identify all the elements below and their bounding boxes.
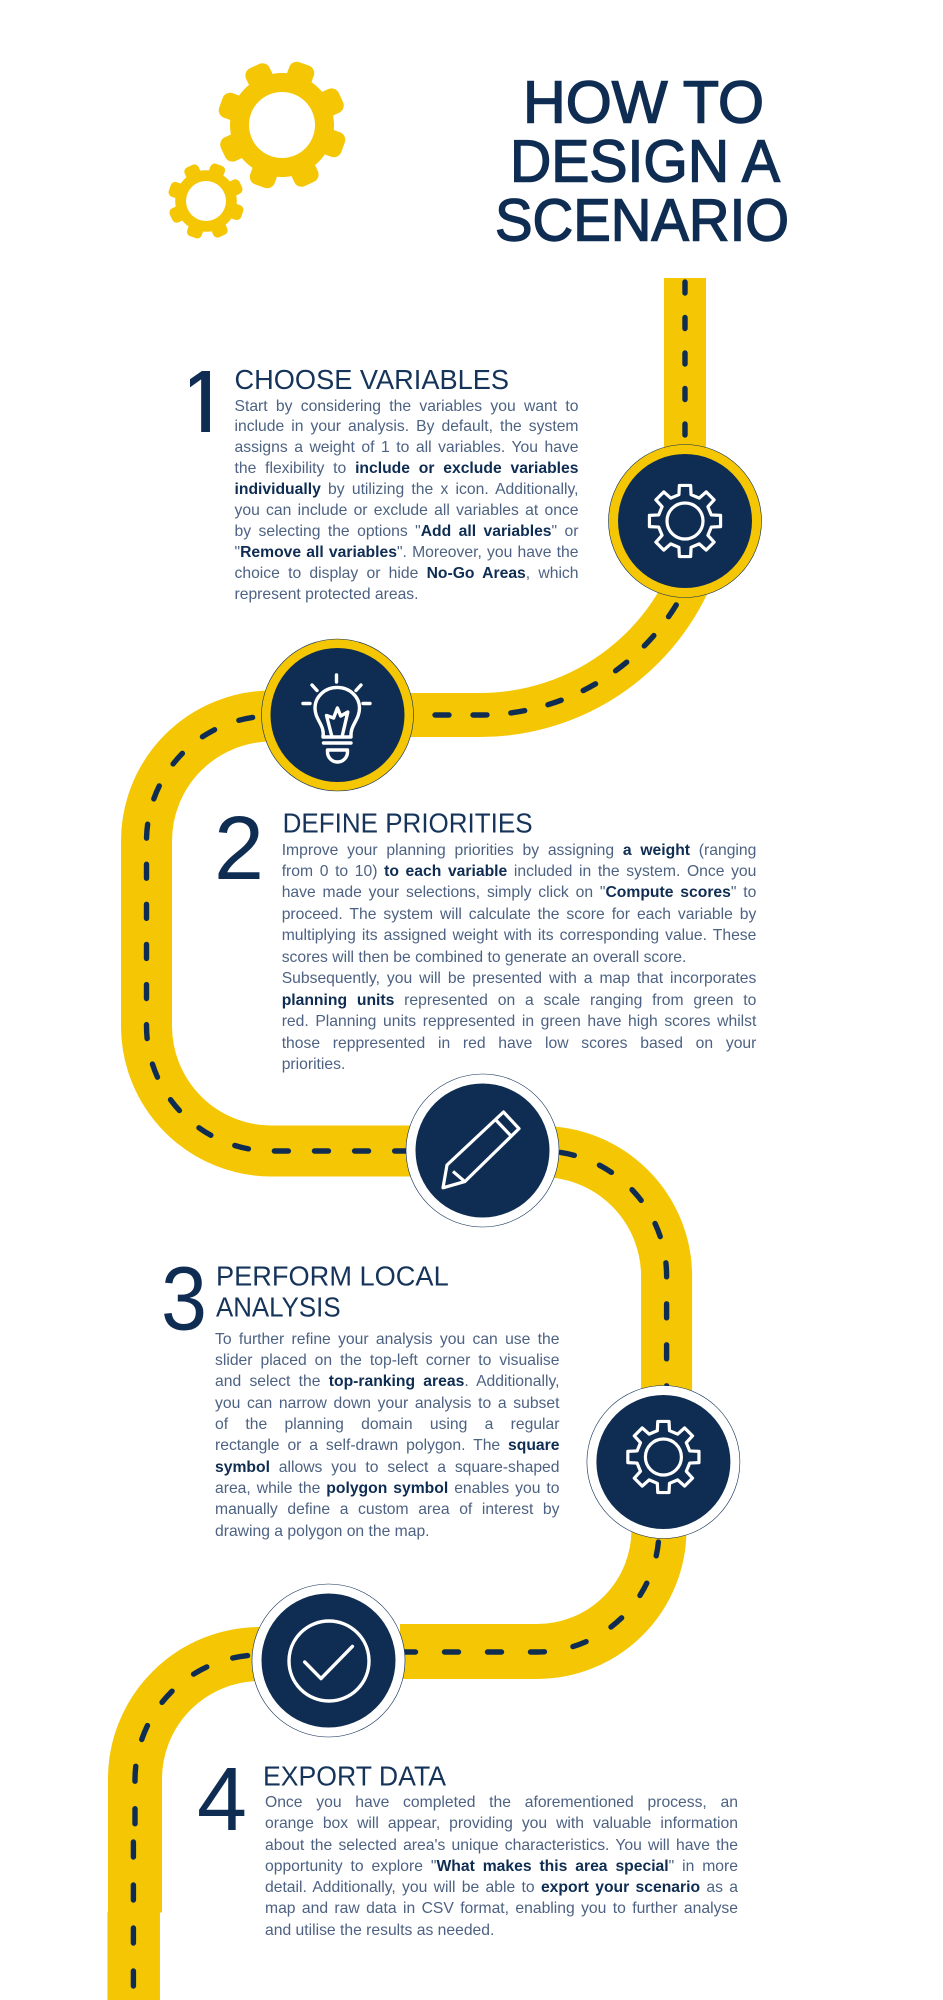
number 2: 2 [214,799,264,899]
text: step 3 description: symbol allows you to select a square-shaped [215,1459,560,1476]
text: step 4 description: opportunity to explore "What makes this area special" in more [265,1858,738,1875]
milestone 3: pencil icon [406,1074,559,1227]
text: step 4 description: detail. Additionally, you will be able to export your scenario as a [265,1879,738,1896]
number 4: 4 [197,1750,247,1850]
road centre dashes [133,282,703,2000]
text: step 2 description: red. Planning units reppresented in green have high scores whilst [282,1013,756,1030]
text: step 4 description: map and raw data in CSV format, enabling you to further analyse [265,1900,738,1917]
text: step 3 description: of the planning domain using a regular [215,1416,560,1433]
text: step 1 description: the flexibility to include or exclude variables [234,460,578,477]
heading: perform local analysis: PERFORM LOCAL [216,1261,449,1292]
title [495,70,789,254]
text: step 3 description: manually define a custom area of interest by [215,1501,560,1518]
icon: small gear [157,152,255,250]
title: SCENARIO [495,188,789,254]
text: step 3 description: slider placed on the top-left corner to visualise [215,1352,560,1369]
milestone 4: gear icon [587,1386,740,1538]
text: step 1 description: you can include or exclude all variables at once [234,502,578,519]
text: step 2 description: Subsequently, you will be presented with a map that incorporates [282,970,756,987]
panel: step 4 export data [197,1750,738,1939]
text: step 4 description [265,1794,738,1939]
panel: step 2 define priorities [214,799,756,1073]
text: step 3 description: To further refine your analysis you can use the [215,1331,560,1348]
heading: choose variables: CHOOSE VARIABLES [234,364,509,395]
text: step 2 description: scores will then be combined to generate an overall score. [282,949,686,966]
text: step 4 description: Once you have completed the aforementioned process, an [265,1794,738,1811]
text: step 3 description: rectangle or a self-drawn polygon. The square [215,1437,560,1454]
title: DESIGN A [510,128,781,194]
text: step 2 description: have made your selections, simply click on "Compute scores" to [282,884,756,901]
text: step 2 description: Improve your planning priorities by assigning a weight (ranging [282,842,756,858]
number 1: 1 [176,350,232,462]
text: step 1 description: individually by utilizing the x icon. Additionally, [234,481,578,498]
text: step 4 description: about the selected area's unique characteristics. You will have the [265,1837,738,1854]
text: step 3 description [215,1331,560,1540]
text: step 2 description [282,842,756,1073]
text: step 1 description: include in your analysis. By default, the system [234,418,578,435]
milestone 1: gear icon [608,444,762,598]
text: step 1 description: assigns a weight of 1 to all variables. You have [234,439,578,456]
milestone 2: light bulb icon [262,639,414,791]
winding yellow road [134,278,703,2000]
title: HOW TO [523,70,764,136]
text: step 3 description: you can narrow down your analysis to a subset [215,1395,560,1412]
heading: perform local analysis: ANALYSIS [216,1292,341,1322]
text: step 1 description: by selecting the options "Add all variables" or [234,523,578,540]
panel: step 1 choose variables [190,364,579,603]
number 3: 3 [161,1250,207,1350]
text: step 2 description: multiplying its assigned weight with its corresponding value. These [282,927,756,944]
milestone 5: check mark icon [252,1584,405,1737]
text: step 2 description: from 0 to 10) to each variable included in the system. Once you [282,863,756,880]
text: step 2 description: priorities. [282,1056,345,1073]
panel: step 3 perform local analysis [161,1250,560,1540]
text: step 4 description: and utilise the results as needed. [265,1922,494,1939]
text: step 2 description: proceed. The system will calculate the score for each variable by [282,906,756,923]
icon: big gear [199,42,365,208]
text: step 3 description: area, while the polygon symbol enables you to [215,1480,560,1497]
text: step 3 description: and select the top-ranking areas. Additionally, [215,1373,560,1390]
text: step 2 description: planning units represented on a scale ranging from green to [282,992,756,1009]
icon: yellow gears [157,42,365,250]
text: step 4 description: orange box will appear, providing you with valuable information [265,1815,738,1832]
text: step 1 description: choice to display or hide No-Go Areas, which [234,565,579,582]
text: step 1 description: represent protected areas. [234,586,418,603]
heading: perform local analysis [216,1261,449,1322]
text: step 1 description [234,398,579,603]
heading: define priorities: DEFINE PRIORITIES [283,808,533,839]
text: step 2 description: those reppresented in red have low scores based on your [282,1035,756,1052]
heading: export data: EXPORT DATA [263,1761,447,1792]
text: step 1 description: "Remove all variables". Moreover, you have the [234,544,578,561]
text: step 1 description: Start by considering the variables you want to [234,398,578,414]
text: step 3 description: drawing a polygon on the map. [215,1523,430,1540]
